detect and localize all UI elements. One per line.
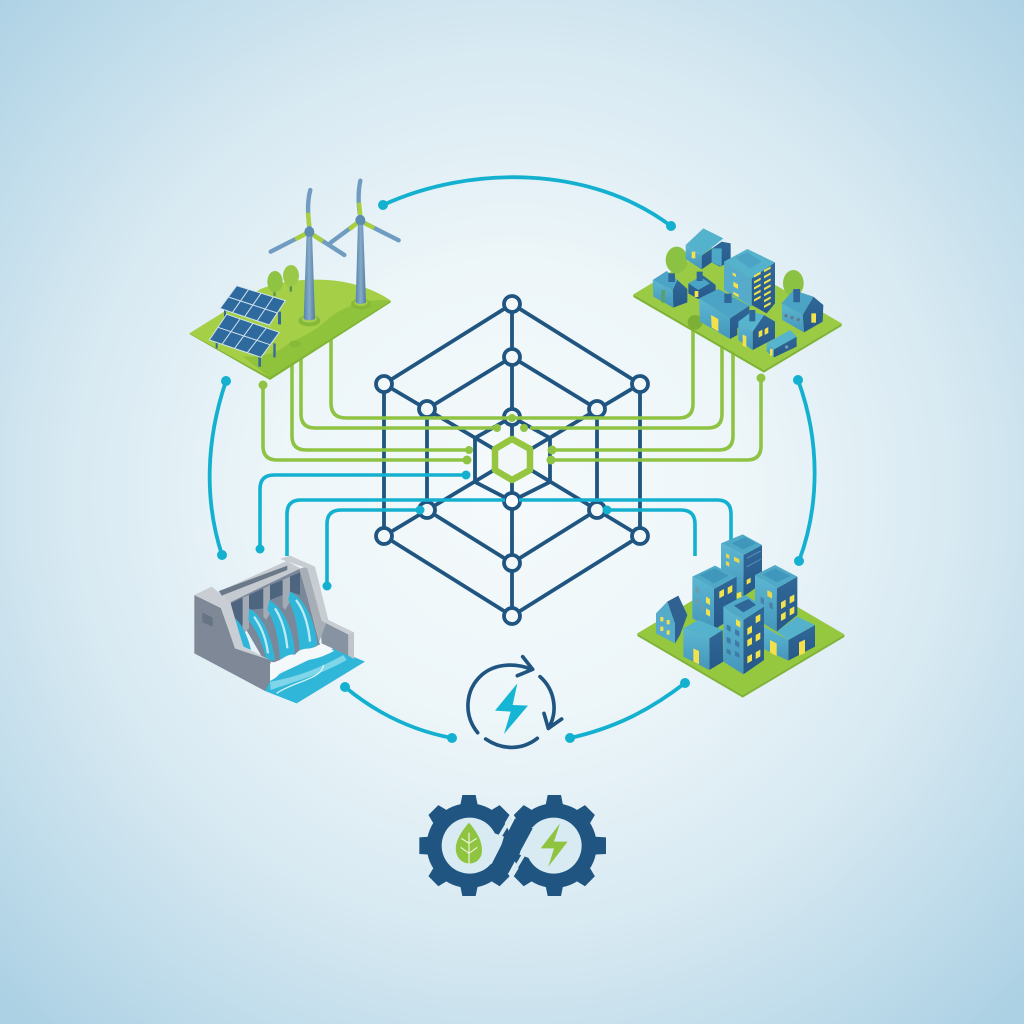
tower back bbox=[721, 534, 762, 597]
icon: green bolt bbox=[541, 823, 568, 867]
right pier bbox=[299, 566, 327, 642]
gear right bbox=[512, 795, 606, 896]
icon: renewable cycle with bolt bbox=[468, 657, 562, 747]
low block right bbox=[764, 617, 815, 661]
house large bbox=[699, 289, 749, 339]
arrow: bottom right bbox=[565, 678, 690, 743]
left wall top bbox=[194, 587, 270, 660]
icon: leaf bbox=[456, 823, 482, 864]
solar panel rear bbox=[220, 286, 285, 325]
scene: wind and solar farm bbox=[189, 181, 399, 380]
arrow: wind to neighbourhood bbox=[378, 177, 676, 231]
turbine right bbox=[331, 181, 399, 309]
network nodes bbox=[376, 296, 648, 624]
water falls bbox=[232, 592, 317, 662]
infinity openings bbox=[442, 818, 582, 874]
house middle bbox=[688, 272, 716, 299]
arrow: neighbourhood to city bbox=[793, 375, 815, 566]
small block bbox=[767, 330, 797, 357]
green connectors bbox=[258, 322, 766, 464]
left wall bbox=[194, 595, 270, 691]
vent bbox=[202, 612, 213, 627]
right wall inner bbox=[320, 620, 348, 656]
icons bottom bbox=[419, 657, 606, 896]
arrow: dam to wind bbox=[210, 376, 231, 560]
tower front bbox=[723, 595, 764, 674]
tower left bbox=[692, 566, 741, 630]
low block left bbox=[683, 620, 723, 670]
land bbox=[633, 248, 842, 373]
land bbox=[637, 573, 844, 698]
arrow: bottom left bbox=[340, 682, 457, 743]
piers bbox=[243, 577, 290, 632]
house right bbox=[782, 289, 823, 332]
right wall top bbox=[280, 556, 354, 634]
gear left bbox=[419, 795, 511, 896]
dam lower wall bbox=[230, 568, 320, 665]
house bbox=[656, 596, 687, 643]
right wall edge bbox=[348, 632, 354, 659]
outer teal cycle arcs bbox=[210, 177, 815, 743]
foam bbox=[270, 645, 334, 681]
scene: hydro dam bbox=[194, 556, 365, 703]
river bbox=[265, 648, 365, 703]
apartment tower bbox=[724, 249, 775, 313]
house front bbox=[738, 310, 775, 350]
green hill bbox=[189, 280, 391, 380]
teal connectors bbox=[256, 470, 731, 590]
tower right bbox=[755, 565, 797, 632]
hexagonal network bbox=[376, 296, 648, 624]
house left bbox=[653, 271, 687, 308]
icon: gears with infinity bbox=[419, 795, 606, 896]
scene: neighbourhood bbox=[633, 228, 842, 373]
trees bbox=[666, 247, 804, 297]
gates bbox=[231, 572, 300, 628]
scene: downtown bbox=[637, 534, 844, 698]
turbine left bbox=[271, 190, 344, 326]
trees bbox=[267, 265, 299, 296]
bridge bbox=[218, 561, 301, 602]
solar panel front bbox=[209, 314, 279, 367]
central green hexagon bbox=[495, 439, 530, 480]
house back bbox=[686, 228, 731, 269]
